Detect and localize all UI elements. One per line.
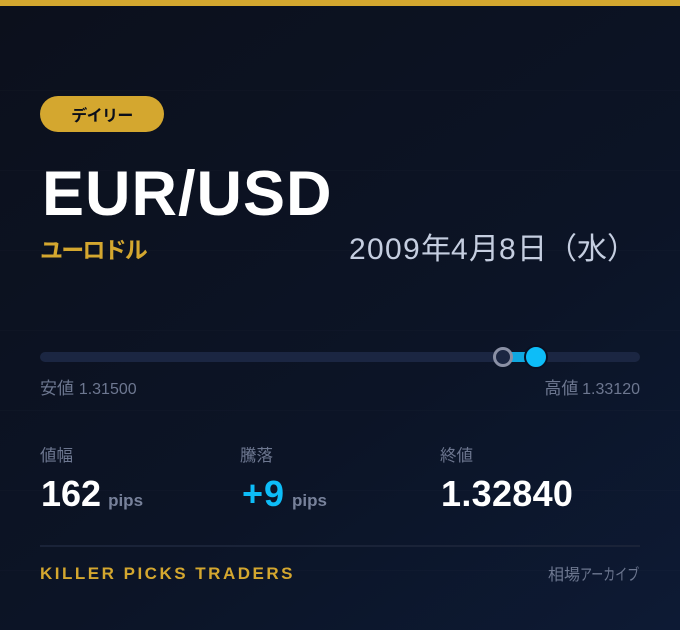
stat: close [440, 442, 573, 514]
slider highlighted range [503, 352, 536, 362]
close marker [493, 347, 513, 367]
stat: range [40, 442, 143, 514]
slider track [40, 352, 640, 362]
footer archive label: 相場 [548, 561, 580, 585]
high label: 高値 1.33120 [544, 374, 640, 399]
top accent bar [0, 0, 680, 6]
subtitle: euro dollar: ユーロドル [40, 231, 146, 265]
footer archive label: アーカイブ [580, 561, 639, 585]
badge: daily [40, 96, 164, 132]
title: currency pair: EUR/USD [42, 159, 333, 229]
low label: 安値 1.31500 [40, 374, 137, 399]
date: 2009年4月8日（水） [349, 224, 637, 268]
footer brand: KILLER PICKS TRADERS [40, 564, 295, 583]
badge: daily: デイリー [71, 102, 133, 126]
range label: 値幅 [40, 442, 73, 466]
change label: 騰落 [240, 442, 273, 466]
footer archive label [548, 561, 639, 585]
stat: change [240, 442, 327, 514]
range value: 162 pips [41, 473, 143, 514]
change value: +9 pips [242, 473, 327, 514]
close label: 終値 [440, 442, 473, 466]
high marker [524, 345, 548, 369]
close value: 1.32840 [441, 473, 573, 514]
range slider [40, 347, 640, 367]
